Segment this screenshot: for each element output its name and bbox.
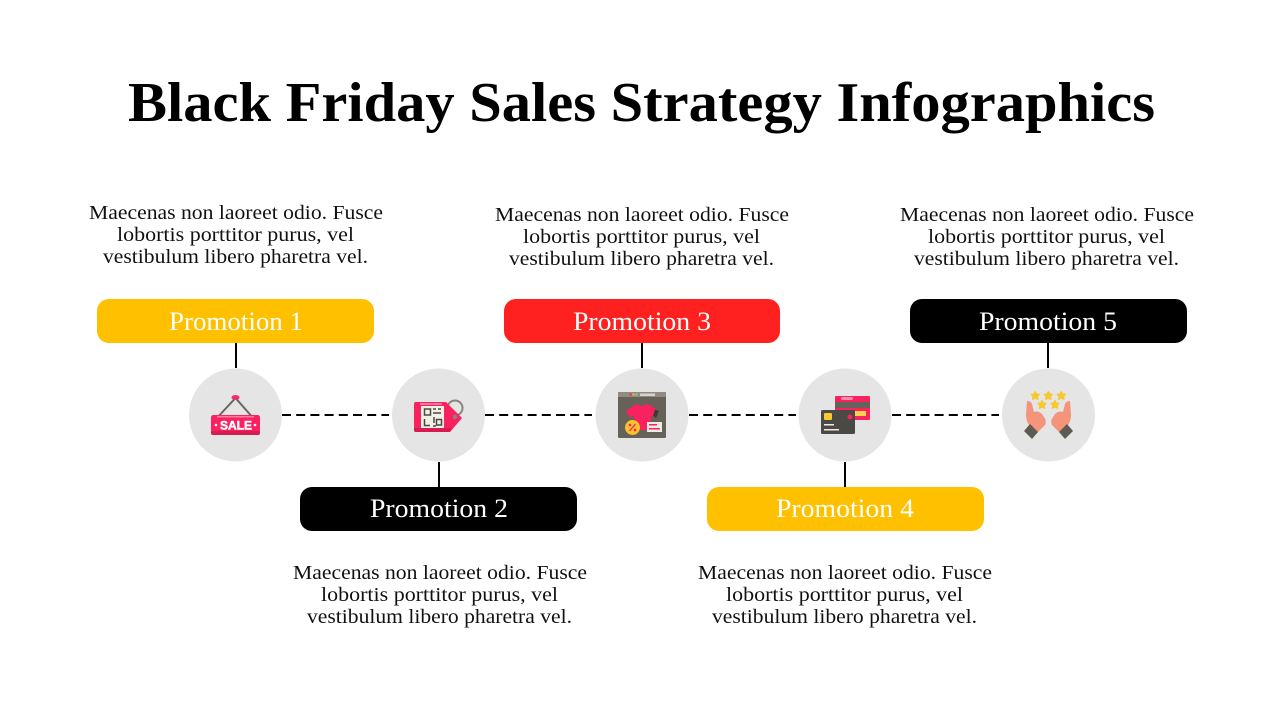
stem 1: [235, 343, 237, 368]
stem 4: [844, 462, 846, 487]
icon: sale sign: [211, 395, 260, 435]
label pill 3: Promotion 3: [573, 307, 711, 336]
node circle 1: [189, 368, 282, 462]
panel: promotion 2: [293, 368, 587, 628]
description 4: lobortis porttitor purus, vel: [726, 584, 963, 606]
title: Black Friday Sales Strategy Infographics: [128, 72, 1155, 134]
label pill 1: [97, 299, 374, 343]
description 1: Maecenas non laoreet odio. Fusce: [89, 202, 383, 224]
stem 5: [1047, 343, 1049, 368]
description 1: lobortis porttitor purus, vel: [117, 224, 354, 246]
description 2: lobortis porttitor purus, vel: [321, 584, 558, 606]
icon: sale sign: SALE: [220, 418, 252, 432]
label pill 5: [910, 299, 1187, 343]
label pill 4: [707, 487, 984, 531]
icon: credit cards: [821, 396, 870, 434]
description 1: [89, 202, 383, 268]
description 3: [495, 204, 789, 270]
description 3: Maecenas non laoreet odio. Fusce: [495, 204, 789, 226]
description 2: [293, 562, 587, 628]
description 2: vestibulum libero pharetra vel.: [307, 606, 572, 628]
description 3: vestibulum libero pharetra vel.: [509, 248, 774, 270]
label pill 2: Promotion 2: [370, 494, 508, 523]
timeline connector: [282, 414, 999, 416]
description 1: vestibulum libero pharetra vel.: [103, 246, 368, 268]
node circle 3: [596, 368, 688, 462]
description 5: Maecenas non laoreet odio. Fusce: [900, 204, 1194, 226]
label pill 1: Promotion 1: [169, 307, 303, 336]
description 5: [900, 204, 1194, 270]
label pill 2: [300, 487, 577, 531]
description 4: Maecenas non laoreet odio. Fusce: [698, 562, 992, 584]
node circle 2: [392, 368, 485, 462]
icon: QR price tag: [414, 400, 462, 432]
description 4: [698, 562, 992, 628]
panel: promotion 3: [495, 204, 789, 462]
icon: shirt discount window: [618, 392, 666, 438]
description 3: lobortis porttitor purus, vel: [523, 226, 760, 248]
panel: promotion 4: [698, 368, 992, 628]
label pill 3: [504, 299, 780, 343]
label pill 4: Promotion 4: [776, 494, 914, 523]
description 2: Maecenas non laoreet odio. Fusce: [293, 562, 587, 584]
node circle 4: [798, 368, 892, 462]
label pill 5: Promotion 5: [979, 307, 1117, 336]
description 5: vestibulum libero pharetra vel.: [914, 248, 1179, 270]
panel: promotion 5: [900, 204, 1194, 462]
icon: hands with stars: [1024, 392, 1073, 439]
description 4: vestibulum libero pharetra vel.: [712, 606, 977, 628]
panel: promotion 1: [89, 202, 383, 462]
description 5: lobortis porttitor purus, vel: [928, 226, 1165, 248]
stem 3: [641, 343, 643, 368]
node circle 5: [1002, 368, 1095, 462]
stem 2: [438, 462, 440, 487]
